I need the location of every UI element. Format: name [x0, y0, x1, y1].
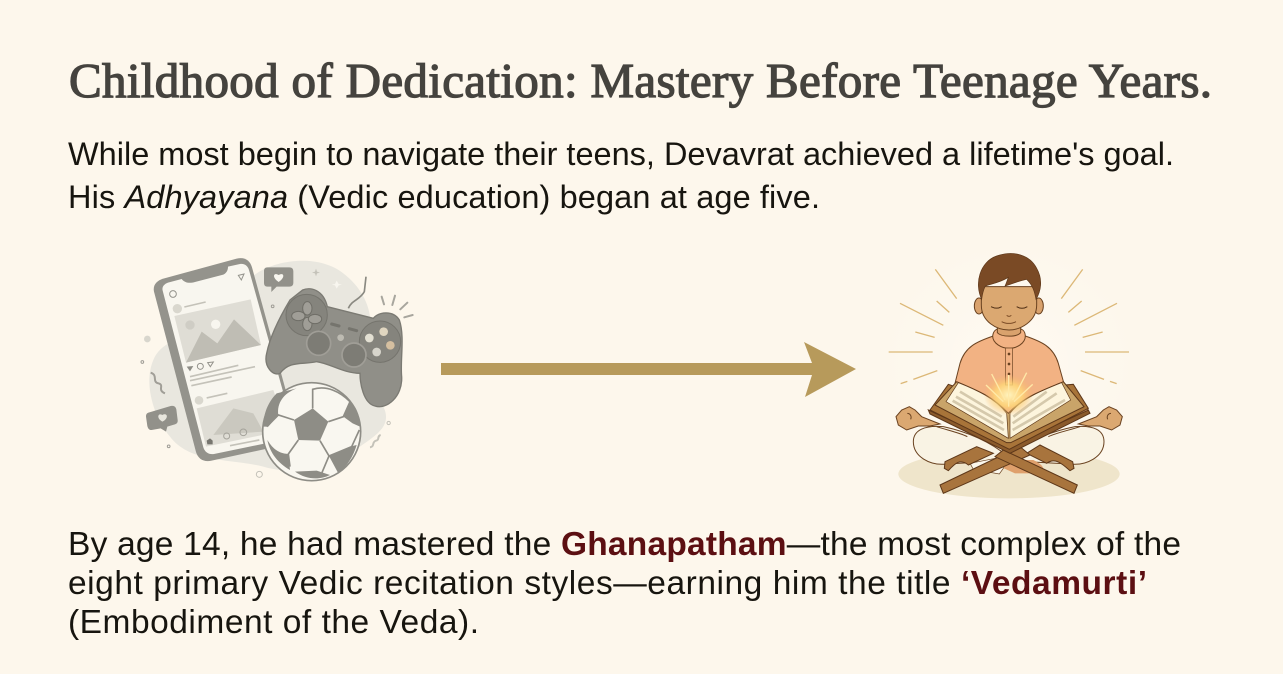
closing text block	[68, 526, 1181, 641]
soft halo	[876, 237, 1142, 490]
post lines	[170, 274, 259, 446]
phone	[154, 258, 297, 461]
game controller	[266, 277, 402, 407]
radiating lines	[889, 269, 1129, 384]
closing text block: (Embodiment of the Veda).	[68, 604, 479, 641]
second post image	[197, 390, 287, 447]
background blob	[149, 261, 386, 471]
torso	[933, 336, 1088, 420]
glow from the book	[984, 373, 1034, 416]
illustration: boy meditating with open book	[876, 237, 1142, 498]
closing text block: By age 14, he had mastered the Ghanapatham—the most complex of the	[68, 526, 1181, 563]
closing text block: eight primary Vedic recitation styles—earning him the title ‘Vedamurti’	[68, 565, 1147, 602]
legs	[913, 426, 1104, 464]
hands	[896, 407, 1122, 430]
football	[263, 383, 361, 481]
floor shadow	[898, 450, 1120, 498]
book stand	[928, 384, 1090, 493]
d-pad	[292, 302, 322, 331]
title: Childhood of Dedication: Mastery Before Teenage Years.	[69, 53, 1212, 108]
intro text block: His Adhyayana (Vedic education) began at age five.	[68, 179, 820, 215]
arrow	[441, 342, 856, 397]
open book	[935, 382, 1084, 443]
collar and placket	[993, 328, 1025, 348]
head	[974, 253, 1043, 336]
post image	[174, 299, 261, 363]
lap cloth	[1003, 460, 1043, 473]
illustration: phone, game controller and football distractions	[141, 258, 413, 481]
intro text block: While most begin to navigate their teens, Devavrat achieved a lifetime's goal.	[68, 136, 1174, 172]
small chat bubbles and decorations	[141, 267, 413, 477]
intro text block	[68, 136, 1174, 215]
